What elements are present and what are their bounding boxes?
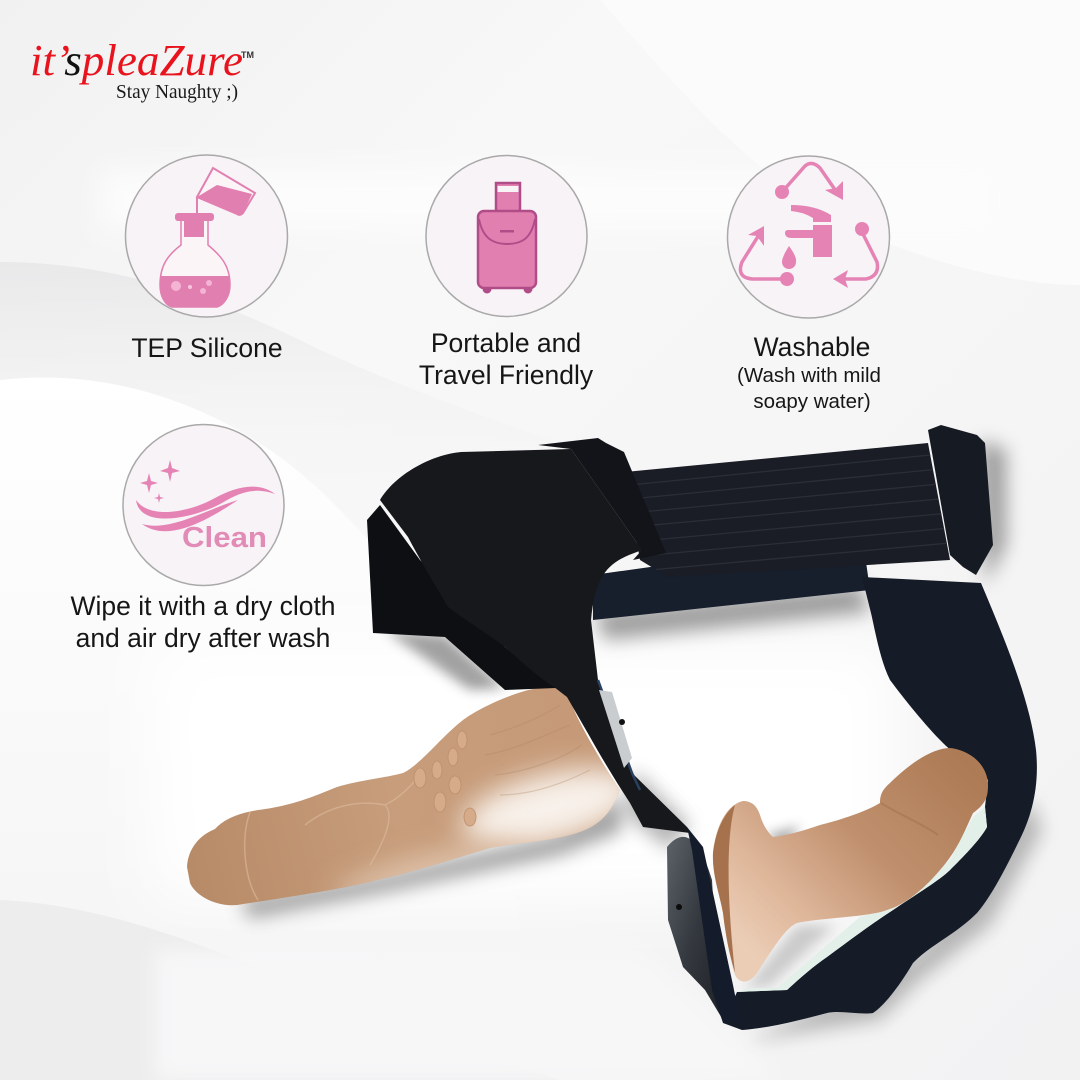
logo: itspleaZure: TM [241, 50, 254, 60]
thigh strap with lining [723, 577, 1037, 1030]
black elastic waist strap [625, 443, 950, 577]
label: Portable and Travel Friendly: Travel Friendly [419, 360, 594, 390]
back strap under pouch [367, 505, 556, 690]
icon: flask and pouring beaker [126, 155, 288, 317]
strap ribbing [620, 453, 950, 570]
icon: tap with cycle arrows [728, 156, 890, 318]
black base disc [667, 837, 723, 1020]
label: Portable and Travel Friendly [419, 328, 594, 390]
lower waist band [593, 555, 870, 620]
feature: Washable [728, 156, 890, 413]
icon: clean swoosh with sparkles: Clean [182, 522, 267, 554]
label: wipe it with a dry cloth: and air dry after wash [76, 623, 330, 653]
icon: suitcase [426, 156, 587, 316]
label: Portable and Travel Friendly: Portable and [431, 328, 581, 358]
label: Washable: Washable [754, 332, 870, 362]
icon: clean swoosh with sparkles [123, 424, 284, 586]
label: wash with mild soapy water [737, 364, 881, 413]
tan attachment, left [187, 687, 646, 912]
logo: itspleaZure [30, 36, 254, 103]
feature: Wipe and air dry [70, 424, 336, 653]
gap behind flange and lining [745, 925, 835, 990]
product photo: harness and attachments [187, 425, 1042, 1040]
label: TEP Silicone: TEP Silicone [131, 333, 283, 363]
buckle [928, 425, 993, 575]
white lining [737, 807, 987, 992]
label: wipe it with a dry cloth [70, 591, 336, 653]
feature: TEP Silicone [126, 155, 288, 363]
front pouch panel and tail [380, 438, 690, 833]
tan attachment, right [713, 748, 988, 982]
feature: Portable and Travel Friendly [419, 156, 594, 390]
logo: itspleaZure: Stay Naughty ;) [116, 82, 238, 103]
drop shadows [240, 440, 1042, 1040]
centre strap band [687, 827, 740, 1023]
label: wash with mild soapy water: (Wash with mild [737, 364, 881, 387]
label: wash with mild soapy water: soapy water) [753, 390, 871, 413]
logo: itspleaZure: it’spleaZure [30, 36, 243, 85]
label: wipe it with a dry cloth: Wipe it with a dry cloth [70, 591, 336, 621]
